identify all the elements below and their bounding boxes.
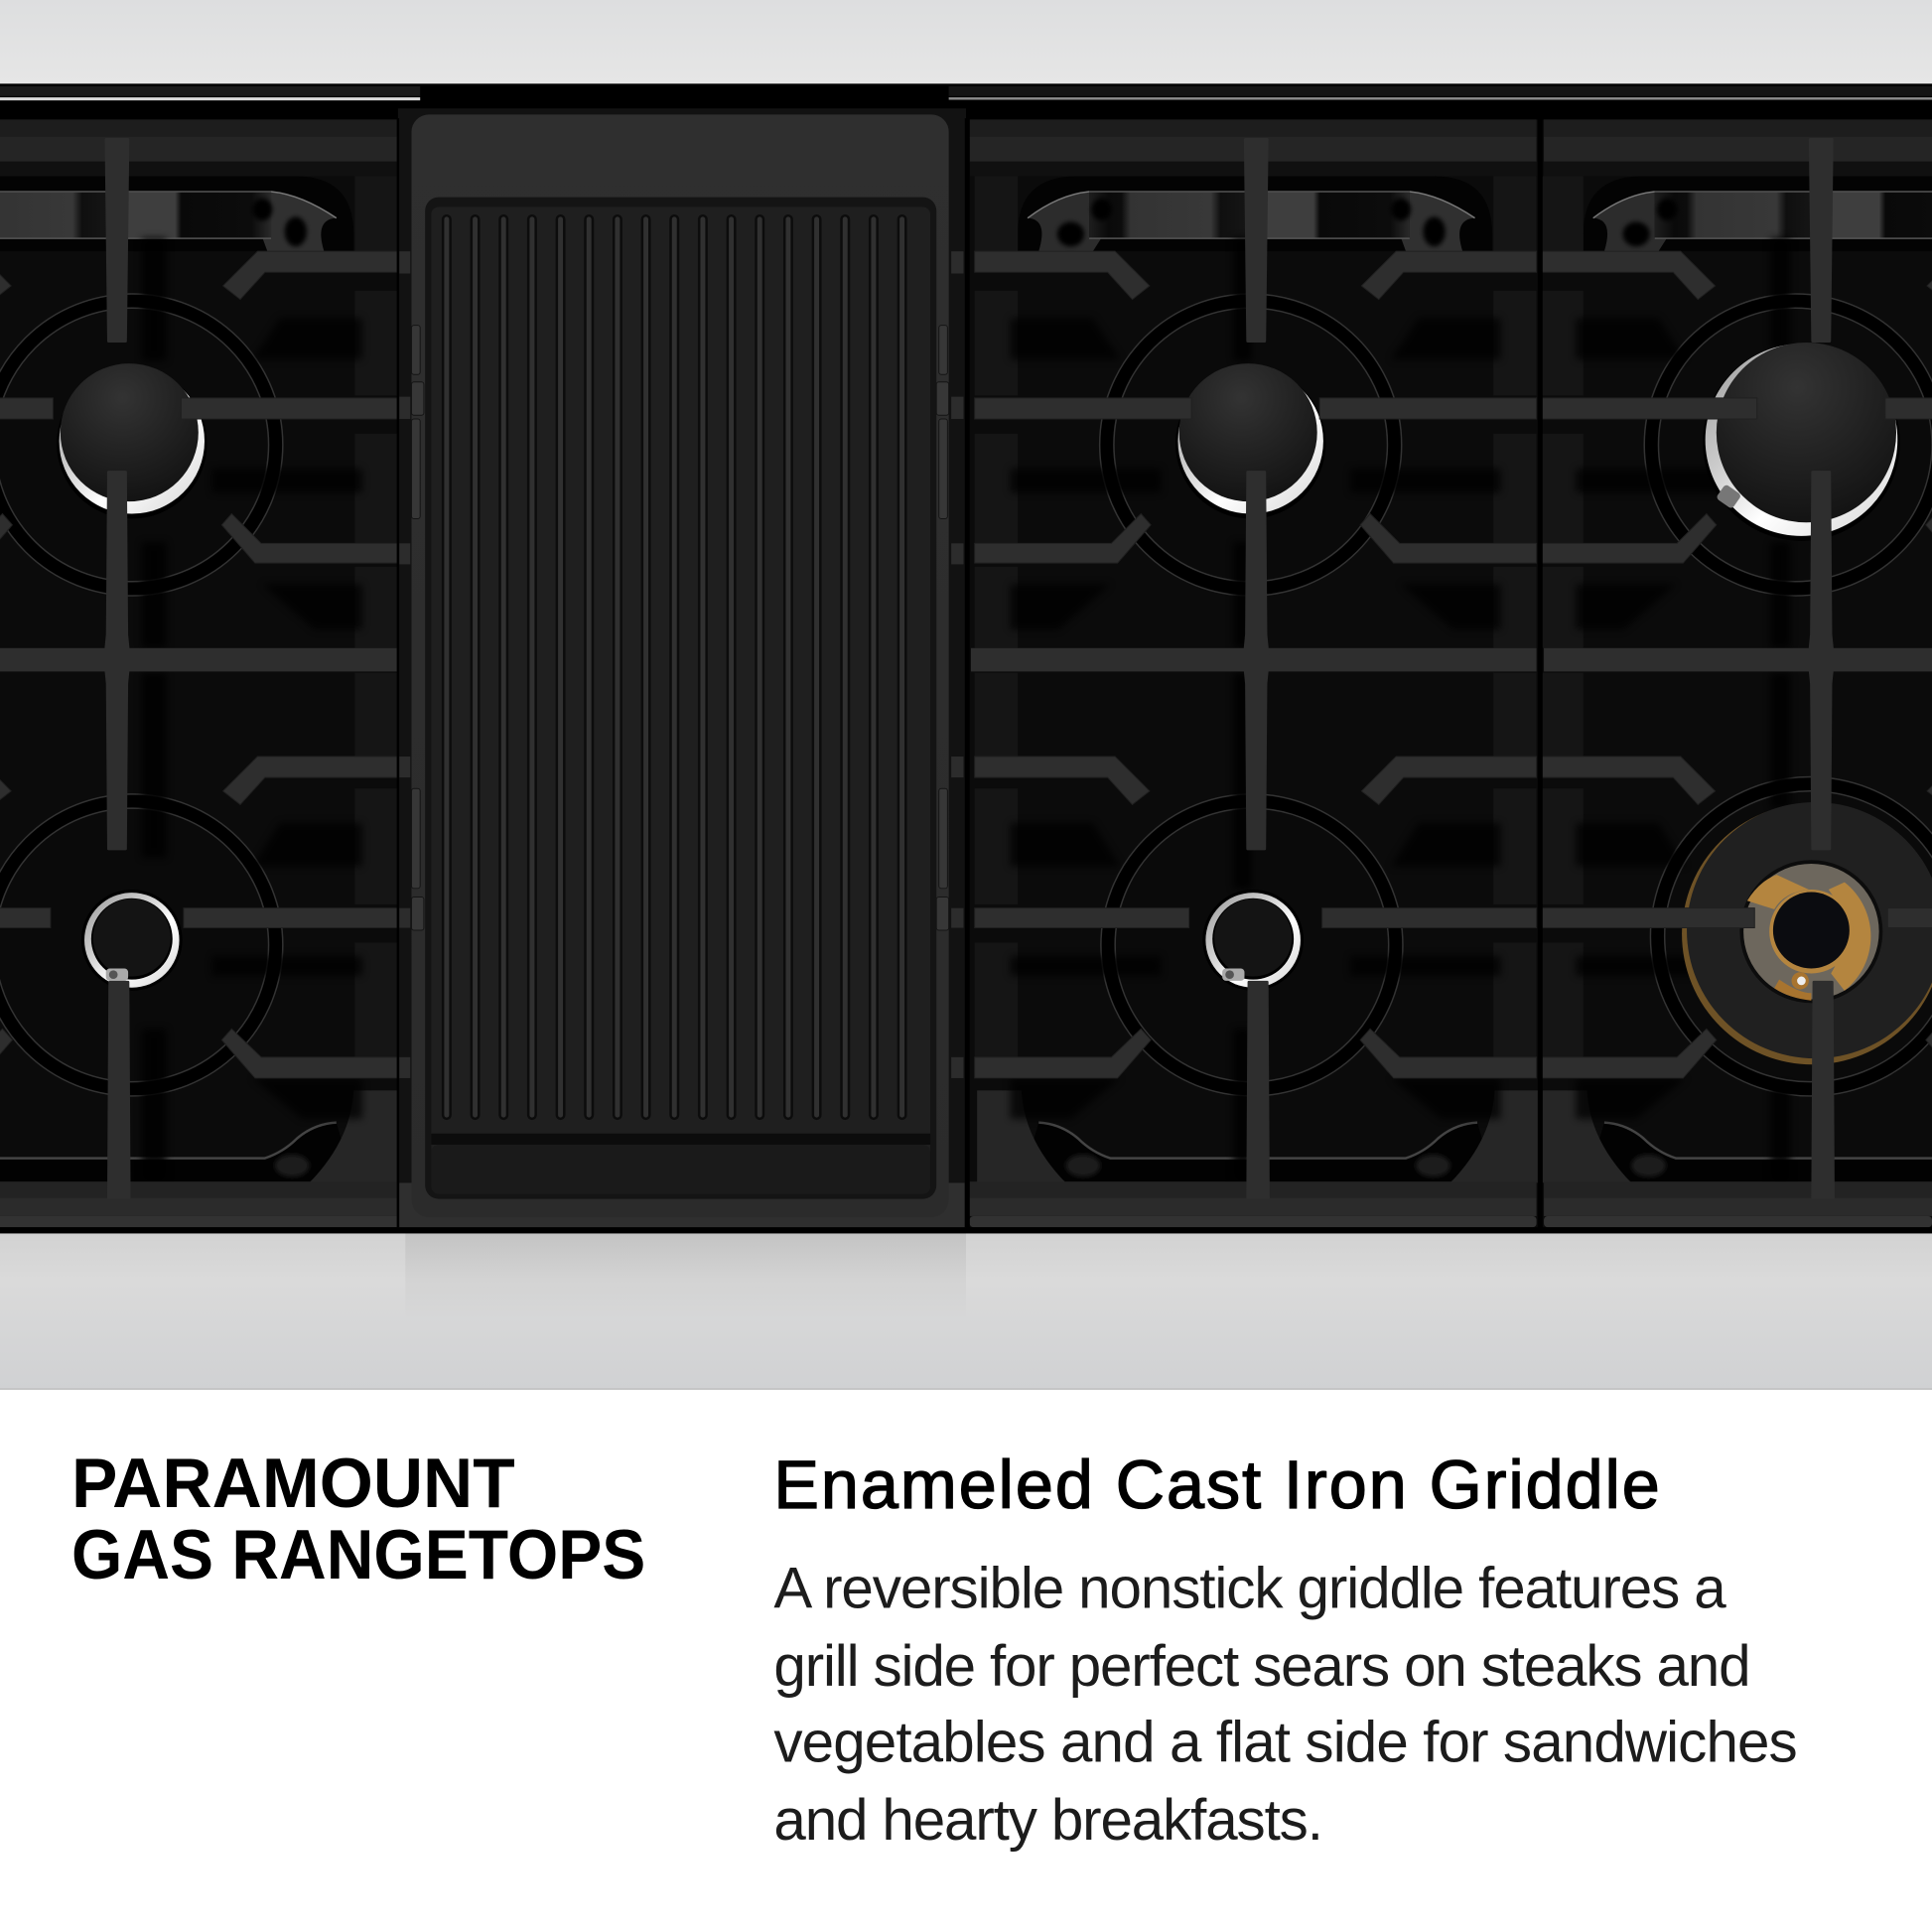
heading: product line (71, 1444, 645, 1593)
grate: left section (0, 119, 398, 1227)
stainless backsplash band (0, 0, 1932, 85)
top enamel tray reflections (0, 176, 1932, 251)
body text: A reversible nonstick griddle features a (773, 1557, 1726, 1621)
burner: front right brass (1682, 802, 1932, 1064)
heading: product line: GAS RANGETOPS (71, 1515, 645, 1593)
burner: rear right large (1703, 343, 1900, 541)
burner: front centre (1202, 890, 1304, 991)
heading: feature title: Enameled Cast Iron Griddle (773, 1448, 1660, 1523)
rangetop black surface (0, 83, 1932, 1235)
griddle (398, 108, 966, 1230)
stainless front rail (0, 1233, 1932, 1390)
raised side pieces (354, 176, 1584, 1057)
griddle side tabs (412, 326, 949, 930)
griddle front lip (431, 1134, 930, 1194)
grate: right section (1540, 119, 1932, 1227)
front enamel trays (0, 1090, 1932, 1182)
burner: rear left (57, 363, 207, 518)
grate cast shadows (142, 238, 1790, 1182)
grate: centre section (970, 119, 1537, 1227)
burner: front left (81, 890, 183, 991)
section gaps (0, 118, 1932, 1233)
body text: and hearty breakfasts. (773, 1788, 1323, 1853)
body text (773, 1557, 1798, 1853)
griddle ridges (443, 215, 905, 1119)
burner pans (0, 294, 1932, 1096)
burner: rear centre (1175, 363, 1325, 518)
heading: product line: PARAMOUNT (71, 1444, 515, 1522)
body text: vegetables and a flat side for sandwiches (773, 1711, 1798, 1775)
body text: grill side for perfect sears on steaks and (773, 1634, 1751, 1699)
griddle base tabs (399, 251, 964, 1078)
